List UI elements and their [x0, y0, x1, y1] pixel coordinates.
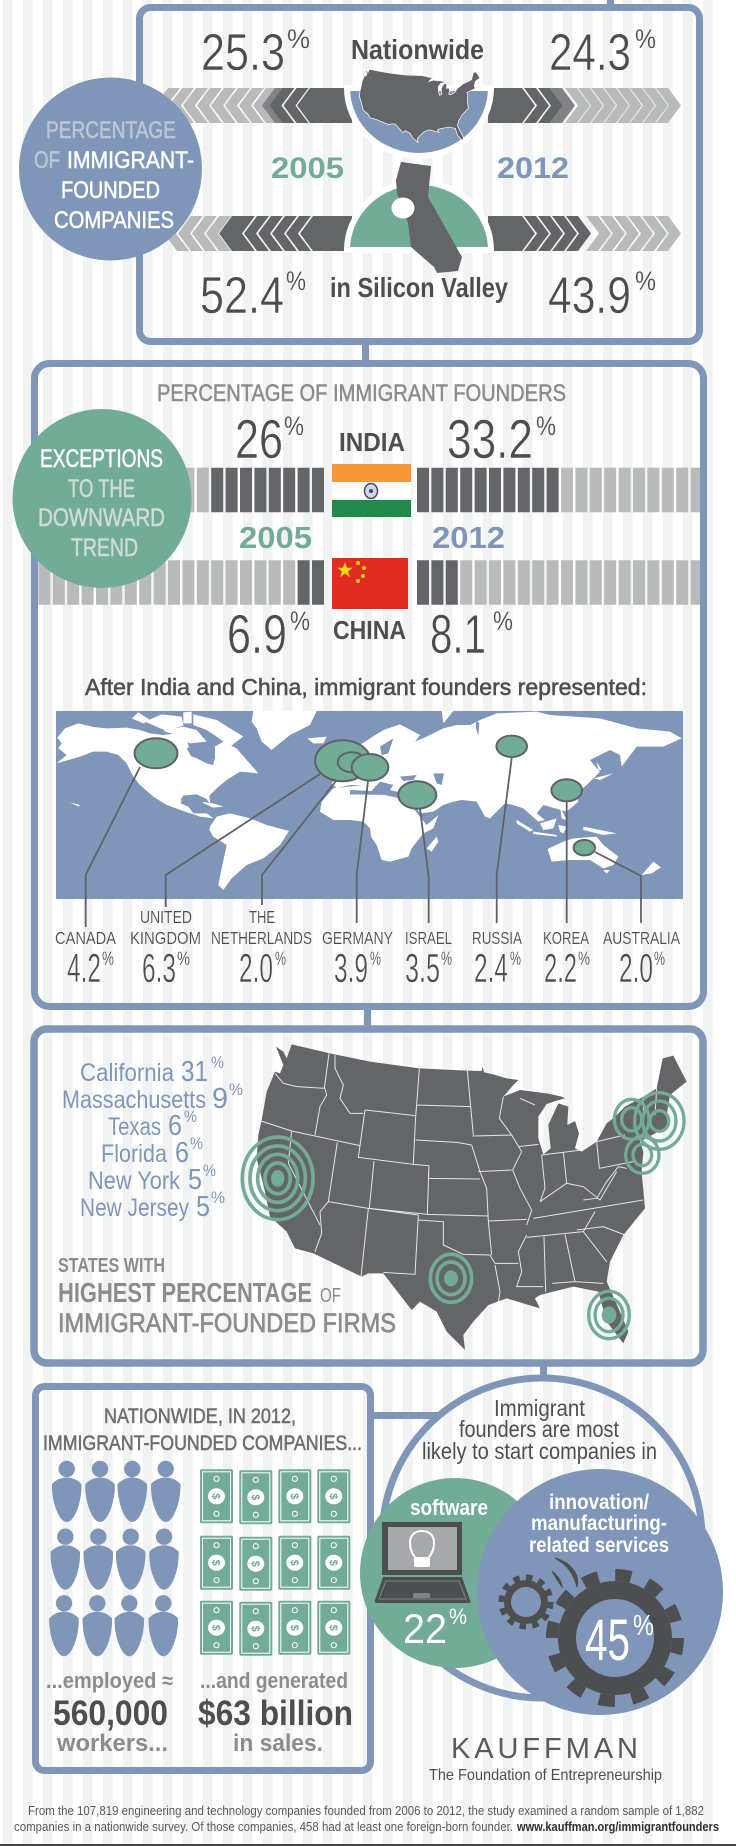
list: state percentages: % [203, 1161, 216, 1180]
text: immigrant founders are most likely: likely to start companies in [422, 1438, 657, 1464]
list: state percentages: New Jersey [80, 1194, 189, 1222]
label: united kingdom: KINGDOM [130, 928, 201, 948]
heading: states with highest percentage: STATES WITH [58, 1255, 165, 1277]
label: korea [543, 928, 590, 991]
rings: texas [430, 1254, 472, 1302]
label: canada [55, 928, 116, 991]
list: state percentages: % [211, 1053, 224, 1072]
list: state percentages: 9 [212, 1083, 228, 1115]
stat: china 2005: 6.9 [227, 603, 287, 665]
label: the netherlands: % [275, 949, 286, 970]
label: germany [322, 928, 393, 991]
stat: nationwide 2005: 25.3 [201, 24, 285, 82]
world map [56, 711, 683, 927]
panel: percentage of immigrant-founded companies [140, 8, 700, 342]
stat: generated 63 billion in sales: ...and generated [200, 1668, 348, 1693]
stat: generated 63 billion in sales: $63 billion [198, 1694, 353, 1733]
icons: dollar bills [200, 1469, 350, 1656]
circle: innovation manufacturing services: related services [529, 1534, 669, 1557]
list: state percentages: New York [88, 1167, 180, 1195]
leader lines [86, 758, 641, 927]
label: israel [405, 928, 452, 991]
panel: states with highest percentage [34, 1029, 703, 1363]
bubbles [134, 736, 595, 855]
stat: employed 560,000 workers: workers... [56, 1730, 168, 1757]
badge: percentage of immigrant-founded companies: FOUNDED [61, 177, 160, 204]
stat: india 2012: % [536, 411, 556, 441]
label: canada: CANADA [55, 928, 116, 948]
label: russia: RUSSIA [472, 928, 522, 948]
badge: percentage of immigrant-founded companies: OF [34, 147, 60, 174]
list: state percentages: California [80, 1059, 174, 1087]
dome: silicon valley with California map [347, 162, 491, 273]
rings: massachusetts [635, 1093, 684, 1149]
label: israel: 3.5 [405, 945, 440, 991]
stat: silicon valley 2012: % [635, 266, 656, 296]
circle: software [360, 1478, 550, 1668]
label: united kingdom: UNITED [140, 907, 192, 927]
badge: exceptions to the downward trend: TO THE [68, 475, 135, 503]
badge: percentage of immigrant-founded companies: PERCENTAGE [46, 117, 176, 144]
icons: workers [49, 1461, 180, 1656]
label: russia: % [510, 949, 521, 970]
label: korea: KOREA [543, 928, 589, 948]
stat: generated 63 billion in sales: in sales. [233, 1730, 323, 1757]
icons: dollar bills: $ [210, 1560, 222, 1566]
list: state percentages: % [190, 1134, 203, 1153]
label: korea: % [578, 949, 590, 970]
panel: exceptions to the downward trend [34, 364, 704, 1006]
stat: silicon valley 2005: % [286, 266, 306, 296]
list: state percentages [62, 1053, 243, 1223]
label: the netherlands: NETHERLANDS [211, 928, 312, 948]
stat: silicon valley 2012: 43.9 [548, 267, 631, 325]
heading: states with highest percentage: OF [320, 1285, 341, 1307]
stat: employed 560,000 workers: 560,000 [53, 1694, 168, 1733]
arrows row: silicon valley [164, 216, 681, 251]
stat: china 2005: % [290, 606, 310, 636]
flag: india [332, 464, 411, 517]
stat: 45%: 45 [585, 1608, 630, 1673]
heading: nationwide in 2012: NATIONWIDE, IN 2012, [104, 1405, 296, 1428]
badge: percentage of immigrant-founded companies: IMMIGRANT- [67, 147, 194, 174]
icons: dollar bills: $ [249, 1494, 261, 1500]
US state map [242, 1044, 687, 1350]
label: united kingdom: 6.3 [142, 945, 176, 991]
list: state percentages: 31 [181, 1056, 208, 1088]
label: australia [603, 928, 680, 991]
list: state percentages: Texas [108, 1113, 161, 1141]
stat: employed 560,000 workers [46, 1668, 173, 1757]
icons: dollar bills: $ [327, 1493, 339, 1499]
icons: dollar bills: $ [288, 1625, 300, 1631]
stat: india 2012: 33.2 [447, 408, 533, 470]
list: state percentages: 5 [196, 1191, 210, 1223]
list: state percentages: Florida [101, 1140, 167, 1168]
circle: innovation manufacturing services [477, 1469, 723, 1715]
stat: 22%: % [449, 1604, 467, 1629]
stat: generated 63 billion in sales [198, 1668, 353, 1757]
icons: dollar bills: $ [327, 1625, 339, 1631]
label: united kingdom [130, 907, 201, 991]
label: canada: % [102, 949, 114, 970]
stat: china 2012: % [493, 606, 513, 636]
rings: new york [614, 1099, 649, 1139]
heading: states with highest percentage: HIGHEST PERCENTAGE [58, 1277, 312, 1308]
circle: innovation manufacturing services: innovation/ [549, 1491, 649, 1514]
text: immigrant founders are most likely: Immigrant [494, 1395, 586, 1421]
icon: laptop with light bulb [375, 1522, 471, 1603]
flag: china [332, 558, 408, 609]
list: state percentages: 6 [168, 1110, 182, 1142]
list: state percentages: Massachusetts [62, 1086, 206, 1114]
heading: in silicon valley: in Silicon Valley [330, 272, 508, 303]
year label 2005: 2005 [271, 152, 344, 185]
text: immigrant founders are most likely: founders are most [459, 1416, 620, 1442]
list: state percentages: % [229, 1080, 243, 1099]
rings: florida [589, 1291, 629, 1339]
badge: exceptions to the downward trend [12, 409, 192, 588]
label: india: INDIA [339, 427, 405, 457]
label: the netherlands [211, 907, 312, 991]
label: korea: 2.2 [544, 945, 577, 991]
label: australia: 2.0 [619, 945, 653, 991]
stat: india 2005: 26 [235, 408, 283, 470]
badge: exceptions to the downward trend: DOWNWARD [38, 504, 165, 532]
panel: most likely sectors [360, 1378, 723, 1715]
icons: dollar bills: $ [288, 1493, 300, 1499]
label: germany: % [370, 949, 381, 970]
label: the netherlands: 2.0 [239, 945, 273, 991]
rings: new jersey [626, 1137, 659, 1173]
heading: nationwide in 2012: IMMIGRANT-FOUNDED COMPANIES... [43, 1432, 362, 1455]
footer: source note [14, 1803, 719, 1834]
year label 2012: 2012 [497, 152, 569, 185]
list: state percentages: % [211, 1188, 225, 1207]
badge: exceptions to the downward trend: EXCEPTIONS [40, 445, 163, 473]
outer ring [382, 1378, 702, 1698]
stat: nationwide 2012: 24.3 [549, 24, 631, 82]
footer: source note: companies in a nationwide survey. Of those companies, 458 had at least one foreign-born founder. [14, 1819, 513, 1834]
stat: china 2012: 8.1 [430, 603, 486, 665]
label: germany: 3.9 [334, 945, 368, 991]
bars: india [120, 468, 700, 512]
heading: percentage of immigrant founders: PERCENTAGE OF IMMIGRANT FOUNDERS [157, 380, 566, 407]
badge: percentage of immigrant-founded companies [19, 78, 202, 260]
icons: dollar bills: $ [327, 1560, 339, 1566]
stat: nationwide 2012: % [635, 24, 656, 54]
bars: china [38, 560, 700, 605]
rings: california [242, 1137, 313, 1220]
label: israel: ISRAEL [405, 928, 452, 948]
logo: kauffman: KAUFFMAN [451, 1733, 638, 1765]
panel: nationwide impact [36, 1386, 370, 1770]
year label 2005: 2005 [239, 520, 312, 555]
logo: kauffman: The Foundation of Entrepreneurship [429, 1767, 662, 1784]
icons: dollar bills: $ [249, 1626, 261, 1632]
badge: percentage of immigrant-founded companies: COMPANIES [54, 207, 174, 234]
connectors between panels [362, 0, 614, 1419]
text: immigrant founders are most likely [422, 1395, 657, 1464]
list: state percentages: 6 [175, 1137, 189, 1169]
dome: nationwide with US map [347, 69, 491, 156]
stat: 22%: 22 [403, 1605, 447, 1652]
label: china: CHINA [333, 615, 406, 645]
heading: nationwide in 2012 [43, 1405, 362, 1455]
label: israel: % [441, 949, 452, 970]
label: united kingdom: % [177, 949, 190, 970]
icons: dollar bills: $ [210, 1493, 222, 1499]
label: canada: 4.2 [67, 945, 101, 991]
icons: dollar bills: $ [288, 1560, 300, 1566]
label: russia [472, 928, 522, 991]
text: after india and china: After India and China, immigrant founders represented: [85, 674, 647, 700]
icons: dollar bills: $ [249, 1561, 261, 1567]
stat: silicon valley 2005: 52.4 [200, 267, 284, 325]
label: the netherlands: THE [249, 907, 275, 927]
list: state percentages: 5 [188, 1164, 202, 1196]
heading: states with highest percentage [58, 1255, 396, 1338]
icon: gears [502, 1558, 678, 1701]
stat: nationwide 2005: % [287, 24, 310, 54]
label: russia: 2.4 [474, 945, 508, 991]
year label 2012: 2012 [432, 520, 505, 555]
circle: software: software [410, 1495, 488, 1520]
logo: kauffman [429, 1733, 662, 1784]
badge: exceptions to the downward trend: TREND [71, 534, 138, 562]
label: australia: % [654, 949, 665, 970]
heading: states with highest percentage: IMMIGRANT-FOUNDED FIRMS [58, 1308, 396, 1338]
heading: nationwide: Nationwide [351, 34, 484, 65]
circle: innovation manufacturing services: manufacturing- [531, 1512, 667, 1535]
label: australia: AUSTRALIA [603, 928, 680, 948]
list: state percentages: % [184, 1107, 197, 1126]
label: germany: GERMANY [322, 928, 393, 948]
arrows row: nationwide [155, 88, 681, 123]
icons: dollar bills: $ [210, 1625, 222, 1631]
stat: india 2005: % [284, 411, 304, 441]
stat: employed 560,000 workers: ...employed ≈ [46, 1668, 173, 1693]
stat: 45%: % [633, 1610, 654, 1642]
